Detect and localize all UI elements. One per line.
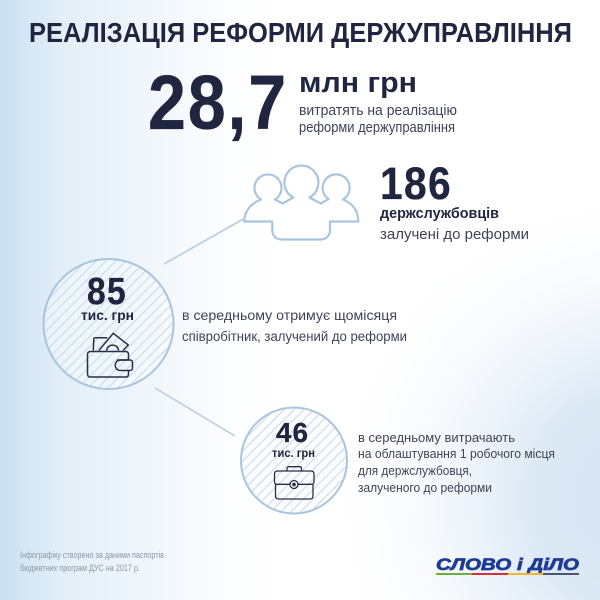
number 186: 186 [380,158,452,209]
workplace description [358,431,555,495]
source note [20,550,164,573]
big number 28,7: 28,7 [148,60,288,146]
unit: млн грн: млн грн [299,67,417,99]
workplace description: залученого до реформи [358,481,492,495]
icon: briefcase [274,467,314,499]
budget description [299,103,457,136]
description: залучені до реформи [380,226,529,243]
connector: people to salary circle [164,218,245,264]
stat: 186 civil servants [380,158,529,243]
headline figure: 28,7 million UAH [148,60,457,146]
icon: wallet [88,333,132,377]
budget description: реформи держуправління [299,120,455,136]
workplace description: для держслужбовця, [358,464,472,478]
salary description: в середньому отримує щомісяця [182,308,397,323]
logo stripe [436,573,579,575]
workplace description: на облаштування 1 робочого місця [358,447,555,461]
icon: group of people [244,166,358,240]
source note: бюджетних програм ДУС на 2017 р. [20,563,140,573]
logo: Слово і Діло: СЛОВО і ДіЛО [436,555,579,574]
source note: Інфографіку створено за даними паспортів [20,550,164,560]
workplace description: в середньому витрачають [358,431,515,445]
label: держслужбовців: держслужбовців [380,205,499,222]
unit: тис. грн: тис. грн [272,446,315,460]
salary description [182,308,407,344]
number 85: 85 [87,271,127,313]
salary description: співробітник, залучений до реформи [182,329,407,344]
number 46: 46 [276,417,309,448]
budget description: витратять на реалізацію [299,103,457,119]
panel: salary circle [44,259,174,389]
unit: тис. грн: тис. грн [81,307,134,323]
connector: salary circle to workplace circle [155,388,235,436]
panel: workplace cost circle [241,408,347,514]
